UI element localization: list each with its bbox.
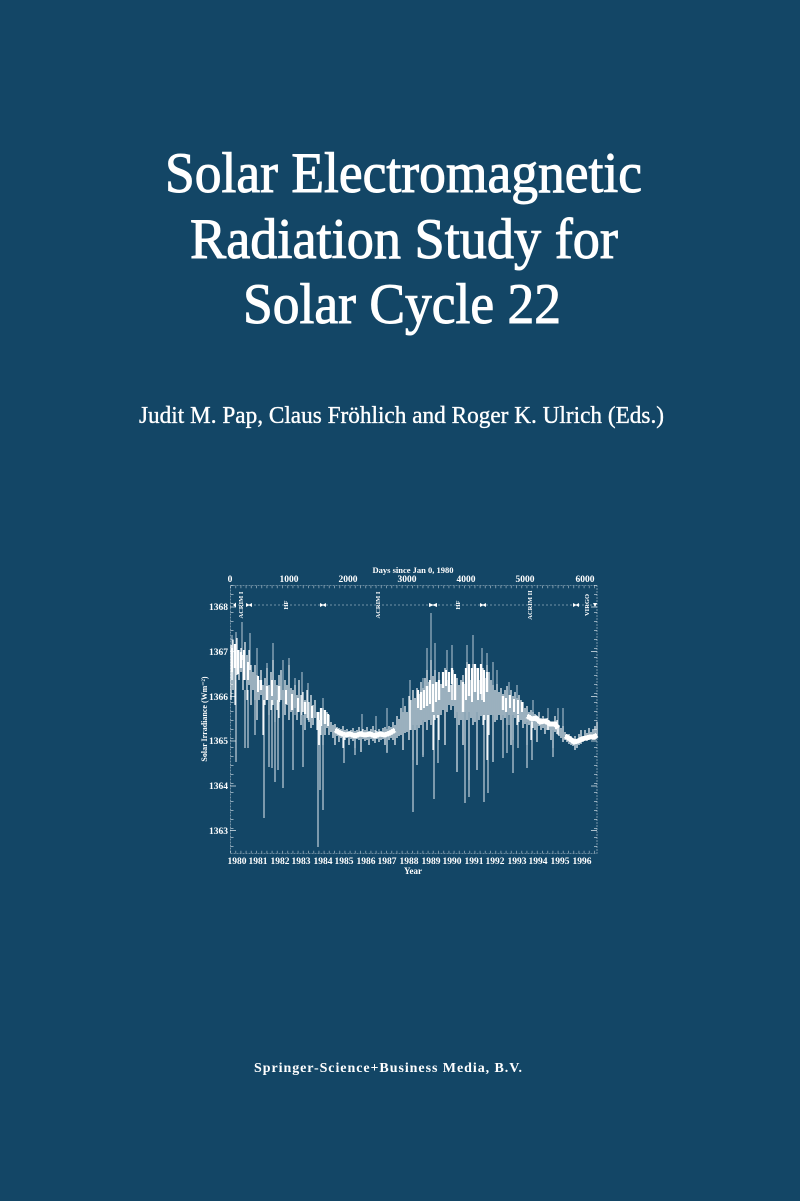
y axis labels: 1365 [209, 737, 228, 747]
chart axis frame [230, 585, 597, 854]
top axis labels [228, 575, 595, 585]
y axis labels: 1368 [209, 603, 228, 613]
irradiance white clusters [232, 644, 597, 742]
y axis labels: 1363 [209, 827, 228, 837]
x axis year labels: 1991 [464, 857, 484, 867]
title: Solar Electromagnetic [165, 142, 642, 205]
x axis year labels [228, 857, 592, 867]
instrument timeline: ACRIM I [238, 591, 245, 618]
x axis year labels: 1982 [270, 857, 290, 867]
instrument timeline: ACRIM II [527, 590, 534, 620]
irradiance core band [231, 638, 597, 780]
x axis year labels: 1996 [572, 857, 592, 867]
chart: solar irradiance [200, 565, 597, 876]
top axis labels: 1000 [280, 575, 299, 585]
instrument timeline [233, 590, 597, 620]
title: Radiation Study for [190, 208, 618, 271]
irradiance lower spikes [236, 680, 553, 847]
x axis year labels: 1994 [528, 857, 548, 867]
top axis labels: 0 [228, 575, 233, 585]
top axis labels: 6000 [576, 575, 595, 585]
publisher: Springer-Science+Business Media, B.V. [254, 1061, 522, 1076]
x axis year labels: 1986 [356, 857, 376, 867]
y axis labels [209, 603, 228, 837]
x axis year labels: 1981 [248, 857, 268, 867]
y axis labels: 1364 [209, 782, 228, 792]
x axis year labels: 1984 [314, 857, 333, 867]
irradiance upper spikes [232, 613, 563, 738]
top axis labels: 3000 [398, 575, 417, 585]
title [165, 142, 642, 336]
top axis labels: 2000 [338, 575, 358, 585]
y axis title: Solar Irradiance (Wm⁻²) [200, 676, 209, 762]
x axis year labels: 1980 [228, 857, 247, 867]
y axis labels: 1367 [209, 648, 228, 658]
instrument timeline: HF [455, 600, 462, 610]
instrument timeline: VIRGO [584, 594, 591, 616]
y axis labels: 1366 [209, 693, 228, 703]
x axis year labels: 1985 [334, 857, 354, 867]
top axis labels: 5000 [516, 575, 535, 585]
x axis year labels: 1992 [486, 857, 505, 867]
x axis year labels: 1987 [378, 857, 397, 867]
x axis year labels: 1988 [400, 857, 419, 867]
instrument timeline: ACRIM I [375, 591, 382, 618]
instrument timeline: HF [283, 600, 290, 610]
x axis year labels: 1993 [508, 857, 527, 867]
authors: Judit M. Pap, Claus Fröhlich and Roger K. Ulrich (Eds.) [139, 403, 664, 429]
x axis title: Year [404, 866, 422, 876]
top axis title: Days since Jan 0, 1980 [372, 565, 454, 575]
x axis year labels: 1990 [442, 857, 462, 867]
top axis labels: 4000 [456, 575, 476, 585]
x axis year labels: 1983 [292, 857, 311, 867]
title: Solar Cycle 22 [243, 273, 561, 336]
x axis year labels: 1995 [550, 857, 570, 867]
x axis year labels: 1989 [422, 857, 441, 867]
